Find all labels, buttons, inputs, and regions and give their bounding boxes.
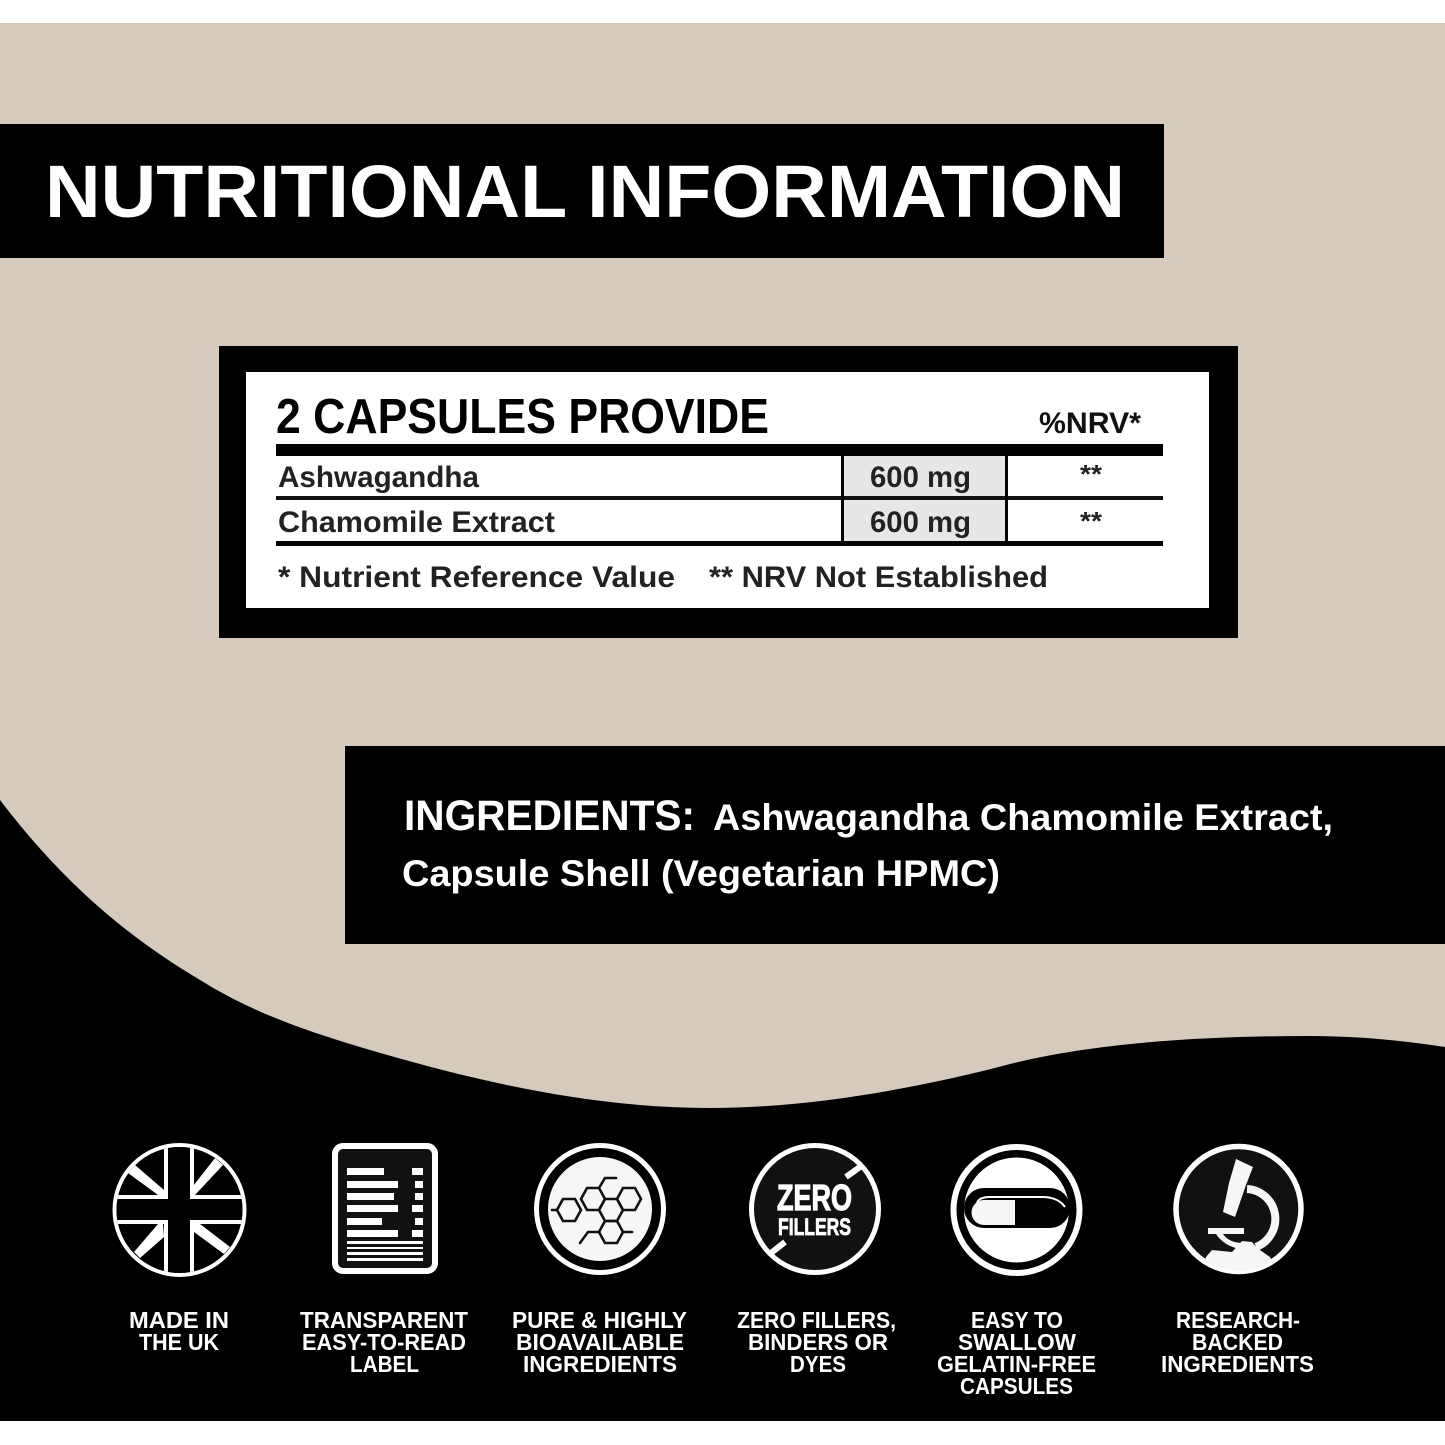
- row: ashwagandha: [278, 459, 1103, 494]
- panel: ingredients: Capsule Shell (Vegetarian HPMC): [402, 853, 1000, 894]
- label: made in the uk: [129, 1307, 229, 1355]
- table heading: 2 CAPSULES PROVIDE: [276, 390, 769, 444]
- footnotes: ** NRV Not Established: [709, 561, 1048, 594]
- label: easy to swallow gelatin-free capsules: SWALLOW: [958, 1329, 1076, 1355]
- label: research-backed ingredients: INGREDIENTS: [1161, 1351, 1314, 1377]
- icon: microscope: [1176, 1146, 1301, 1290]
- label: easy to swallow gelatin-free capsules: EASY TO: [971, 1307, 1063, 1333]
- panel: nutrition table: [219, 346, 1238, 638]
- label: transparent easy-to-read label: [300, 1307, 468, 1377]
- label: research-backed ingredients: [1161, 1307, 1314, 1377]
- title banner: NUTRITIONAL INFORMATION: [45, 150, 1125, 233]
- footnotes: [278, 561, 1048, 594]
- label: research-backed ingredients: BACKED: [1192, 1329, 1283, 1355]
- label: made in the uk: MADE IN: [129, 1307, 229, 1333]
- icon: molecule: [536, 1146, 664, 1272]
- label: research-backed ingredients: RESEARCH-: [1176, 1307, 1300, 1333]
- icon: capsule: [954, 1147, 1080, 1273]
- black wave footer: [0, 800, 1445, 1421]
- label: zero fillers, binders or dyes: [737, 1307, 896, 1377]
- row: ashwagandha: 600 mg: [870, 461, 971, 494]
- icon: transparent label: [335, 1146, 435, 1271]
- label: easy to swallow gelatin-free capsules: GELATIN-FREE: [937, 1351, 1096, 1377]
- icon: zero fillers: ZERO: [777, 1177, 852, 1218]
- label: pure and highly bioavailable ingredients: [512, 1307, 687, 1377]
- label: transparent easy-to-read label: EASY-TO-READ: [302, 1329, 466, 1355]
- row: ashwagandha: Ashwagandha: [278, 461, 479, 494]
- label: easy to swallow gelatin-free capsules: CAPSULES: [960, 1373, 1073, 1399]
- label: pure and highly bioavailable ingredients: BIOAVAILABLE: [516, 1329, 684, 1355]
- label: transparent easy-to-read label: LABEL: [350, 1351, 419, 1377]
- nrv column heading: %NRV*: [1039, 407, 1141, 440]
- panel: ingredients: Ashwagandha Chamomile Extract,: [713, 797, 1333, 838]
- title banner: [0, 124, 1164, 258]
- label: pure and highly bioavailable ingredients: PURE & HIGHLY: [512, 1307, 687, 1333]
- row: ashwagandha: **: [1080, 459, 1103, 489]
- row: chamomile extract: **: [1080, 506, 1103, 536]
- row: chamomile extract: 600 mg: [870, 506, 971, 539]
- icon: zero fillers: FILLERS: [778, 1214, 851, 1241]
- row: chamomile extract: [278, 506, 1103, 539]
- label: made in the uk: THE UK: [139, 1329, 219, 1355]
- icon: union flag: [110, 1140, 250, 1280]
- row: chamomile extract: Chamomile Extract: [278, 506, 555, 539]
- label: zero fillers, binders or dyes: BINDERS OR: [748, 1329, 888, 1355]
- panel: ingredients: [345, 746, 1445, 944]
- icon: zero fillers: [752, 1146, 878, 1272]
- label: pure and highly bioavailable ingredients: INGREDIENTS: [523, 1351, 677, 1377]
- label: zero fillers, binders or dyes: DYES: [790, 1351, 846, 1377]
- footnotes: * Nutrient Reference Value: [278, 561, 675, 594]
- label: zero fillers, binders or dyes: ZERO FILLERS,: [737, 1307, 896, 1333]
- label: transparent easy-to-read label: TRANSPARENT: [300, 1307, 468, 1333]
- panel: ingredients: INGREDIENTS:: [404, 792, 695, 840]
- label: easy to swallow gelatin-free capsules: [937, 1307, 1096, 1399]
